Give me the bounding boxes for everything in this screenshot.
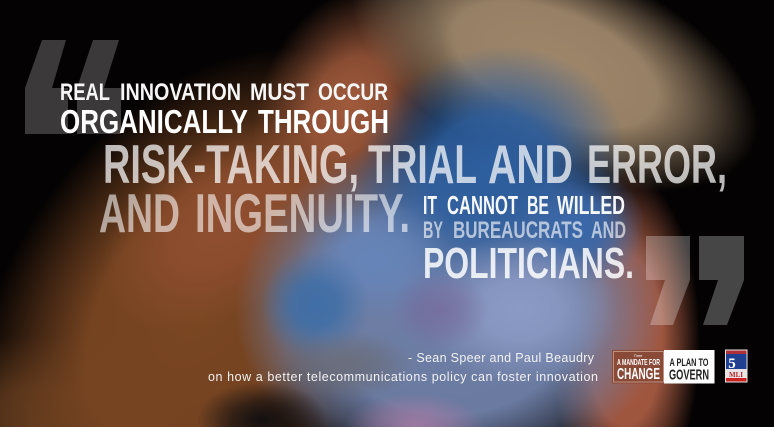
quote text: IT	[423, 190, 437, 220]
opening quotation mark	[25, 40, 121, 134]
logo: MLI 5 years: 5	[728, 356, 736, 372]
attribution: - Sean Speer and Paul Beaudry	[408, 351, 595, 365]
quote text: WILLED	[557, 190, 625, 220]
quote text: RISK-TAKING,	[103, 133, 359, 195]
quote text: MUST	[250, 79, 309, 106]
quote text: BE	[527, 190, 549, 220]
logo: a mandate for change: CHANGE	[617, 366, 660, 383]
logo: a mandate for change: A MANDATE FOR	[617, 357, 660, 367]
quote text: INNOVATION	[120, 79, 241, 106]
quote text: AND	[99, 182, 180, 244]
logo: a plan to govern	[664, 350, 714, 384]
quote text: AND	[591, 217, 626, 244]
quote text: AND	[488, 133, 573, 195]
quote text: BY	[423, 217, 443, 244]
attribution: on how a better telecommunications policy can foster innovation	[208, 370, 598, 384]
logo: a plan to govern: GOVERN	[669, 366, 709, 384]
quote text: TRIAL	[368, 133, 477, 195]
logo: a mandate for change: Time	[634, 353, 643, 358]
quote text: POLITICIANS.	[423, 239, 634, 288]
quote text: BUREAUCRATS	[453, 217, 583, 244]
logo: MLI 5 years	[725, 350, 748, 382]
attribution	[208, 351, 598, 384]
logo: a plan to govern: A PLAN TO	[670, 357, 709, 369]
quote text: ORGANICALLY	[60, 103, 248, 140]
quote text: CANNOT	[447, 190, 518, 220]
closing quotation mark	[646, 236, 744, 325]
logo: a mandate for change	[612, 350, 664, 384]
quote text: INGENUITY.	[195, 182, 410, 244]
quote text: REAL	[60, 79, 110, 106]
quote text: OCCUR	[318, 79, 388, 106]
quote text: THROUGH	[258, 103, 389, 140]
logo: MLI 5 years: MLI	[729, 371, 743, 379]
quote text	[60, 79, 727, 288]
